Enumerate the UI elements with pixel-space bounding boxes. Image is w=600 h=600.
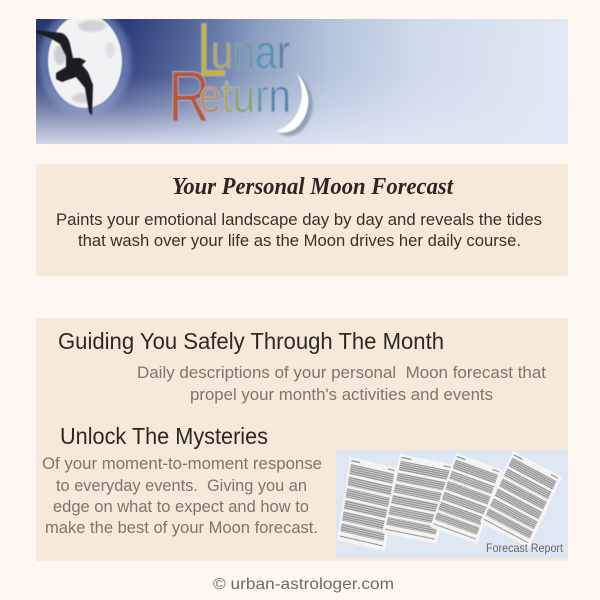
- text block: mysteries: Of your moment-to-moment response: [42, 454, 322, 473]
- banner: Lunar Return: [36, 8, 568, 144]
- logo text: Lunar: unar: [211, 25, 290, 78]
- caption: Forecast Report: Forecast Report: [486, 541, 564, 555]
- heading: Guiding You Safely: Guiding You Safely Through The Month: [58, 328, 444, 354]
- image: forecast report pages: [336, 450, 568, 558]
- footer: copyright: © urban-astrologer.com: [213, 576, 394, 593]
- icon: full moon: [48, 14, 122, 108]
- heading: Your Personal Moon Forecast: Your Personal Moon Forecast: [172, 174, 454, 200]
- document page 1: [337, 457, 398, 551]
- document page 3: [430, 453, 503, 544]
- document page 2: [382, 454, 455, 544]
- document page 4: [480, 451, 562, 548]
- panel: moon forecast intro: [36, 164, 568, 276]
- text block: intro: Paints your emotional landscape day by day and reveals the tides: [56, 210, 542, 229]
- text block: daily descriptions: [137, 363, 546, 404]
- panel: guidance: [36, 318, 568, 561]
- heading: Unlock The Mysteries: Unlock The Mysteries: [60, 423, 268, 449]
- logo text: Return: eturn: [199, 69, 291, 122]
- text block: intro: that wash over your life as the Moon drives her daily course.: [78, 231, 521, 250]
- text block: mysteries: [42, 454, 322, 537]
- text block: mysteries: edge on what to expect and how to: [53, 497, 309, 516]
- icon: crescent moon: [276, 72, 313, 136]
- text block: mysteries: make the best of your Moon forecast.: [45, 518, 318, 537]
- logo text: Return: R: [168, 57, 210, 137]
- icon: bird silhouette: [36, 30, 93, 116]
- text block: intro: [56, 210, 542, 250]
- text block: daily descriptions: propel your month's activities and events: [190, 385, 493, 404]
- text block: mysteries: to everyday events. Giving you an: [56, 476, 307, 495]
- text block: daily descriptions: Daily descriptions of your personal Moon forecast that: [137, 363, 546, 382]
- logo text: Lunar: L: [197, 8, 227, 93]
